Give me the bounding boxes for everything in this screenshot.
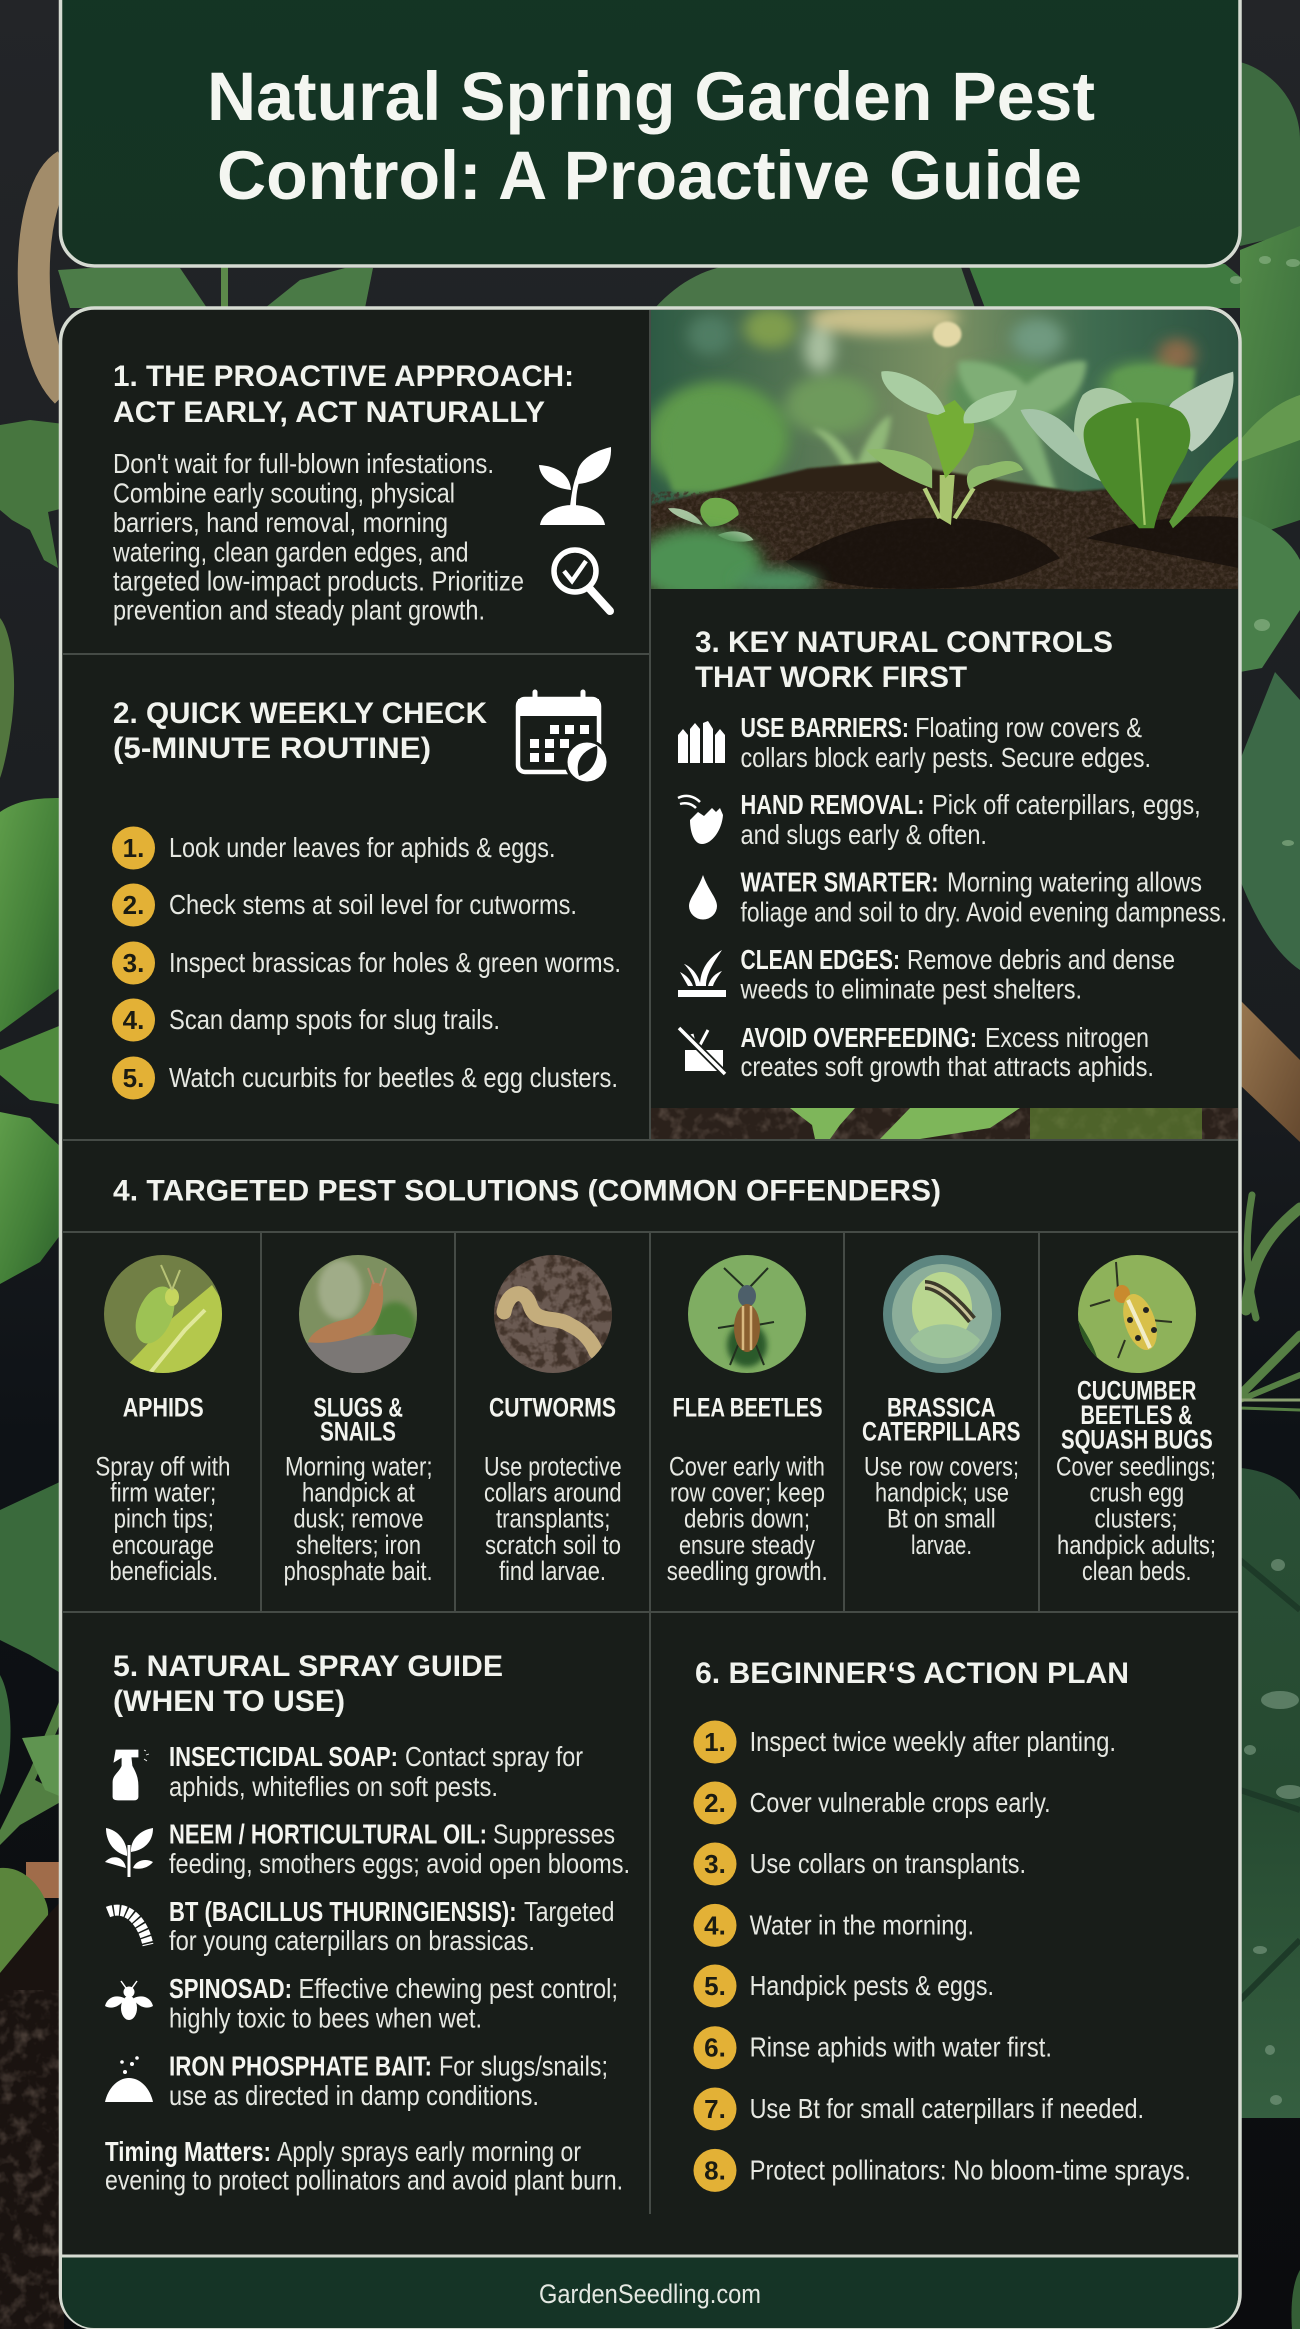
- pest card: brassica caterpillars: Use row covers;: [864, 1451, 1019, 1481]
- action list: 4.: [704, 1910, 726, 1940]
- action list: 2.: [704, 1788, 726, 1818]
- pest card: brassica caterpillars: CATERPILLARS: [862, 1417, 1020, 1447]
- serrated leaf, left: [0, 420, 64, 568]
- header banner: [60, 0, 1240, 266]
- heading 2: (5-MINUTE ROUTINE): [113, 732, 431, 765]
- heading 2: [113, 697, 488, 765]
- pest card: aphids: [95, 1255, 230, 1586]
- background seedlings: [667, 361, 1195, 492]
- photo: slug: [299, 1255, 417, 1373]
- action list: 5.: [704, 1971, 726, 2001]
- item: Bt: Targeted: [524, 1896, 614, 1927]
- action list: 6.: [704, 2033, 726, 2063]
- action list: Inspect twice weekly after planting.: [750, 1726, 1116, 1757]
- footer website: GardenSeedling.com: [539, 2279, 761, 2309]
- pest card: cucumber beetles and squash bugs: [1056, 1255, 1216, 1586]
- item: neem oil: NEEM / HORTICULTURAL OIL:: [169, 1819, 487, 1850]
- action list: 7.: [704, 2094, 726, 2124]
- bottom photo strip: [651, 1108, 1238, 1139]
- pest card: brassica caterpillars: Bt on small: [887, 1504, 996, 1534]
- twine loop: [34, 165, 66, 392]
- body text 1: Combine early scouting, physical: [113, 478, 455, 508]
- soil: [650, 462, 1240, 595]
- pest card: brassica caterpillars: handpick; use: [875, 1478, 1009, 1508]
- item: clean edges: weeds to eliminate pest shelters.: [740, 974, 1082, 1005]
- pest card: aphids: APHIDS: [123, 1393, 204, 1423]
- soil, lower left: [0, 1898, 64, 2329]
- item: clean edges: CLEAN EDGES:: [740, 944, 900, 975]
- action list: Rinse aphids with water first.: [750, 2032, 1052, 2063]
- main panel: [60, 302, 1240, 2329]
- pest card: cutworms: CUTWORMS: [489, 1393, 616, 1423]
- basil leaves, left: [0, 798, 64, 1032]
- heading 5: 5. NATURAL SPRAY GUIDE: [113, 1650, 503, 1683]
- droplets on bright leaves: [1230, 256, 1300, 846]
- central seedling: [866, 371, 1023, 525]
- pest card: slugs and snails: handpick at: [302, 1478, 415, 1508]
- item: iron phosphate bait: [105, 2051, 608, 2111]
- photo: aphid: [104, 1255, 222, 1373]
- title: [207, 58, 1095, 214]
- timing note: Timing Matters:: [105, 2136, 271, 2167]
- action list: 8.: [704, 2155, 726, 2185]
- pest card: brassica caterpillars: [862, 1255, 1020, 1560]
- heading 3: 3. KEY NATURAL CONTROLS: [695, 626, 1113, 659]
- heading 1: ACT EARLY, ACT NATURALLY: [113, 396, 545, 429]
- item: use barriers: USE BARRIERS:: [740, 712, 909, 743]
- body text 1: prevention and steady plant growth.: [113, 594, 485, 626]
- body text 1: targeted low-impact products. Prioritize: [113, 566, 524, 596]
- pest card: flea beetles: FLEA BEETLES: [672, 1393, 822, 1423]
- item: clean edges: Remove debris and dense: [907, 944, 1175, 975]
- item: spinosad: [105, 1973, 618, 2034]
- item: neem oil: Suppresses: [493, 1819, 615, 1850]
- pest card: cutworms: transplants;: [496, 1504, 610, 1534]
- item: Bt: for young caterpillars on brassicas.: [169, 1925, 535, 1956]
- pest card: cucumber beetles and squash bugs: SQUASH BUGS: [1061, 1424, 1213, 1454]
- item: spinosad: Effective chewing pest control;: [298, 1973, 618, 2004]
- heading 3: THAT WORK FIRST: [695, 661, 967, 694]
- body text 1: Don't wait for full-blown infestations.: [113, 448, 494, 479]
- checklist: Check stems at soil level for cutworms.: [169, 889, 577, 920]
- icon: calendar leaf: [518, 692, 608, 783]
- item: insecticidal soap: Contact spray for: [405, 1741, 583, 1772]
- pest card: cutworms: find larvae.: [499, 1556, 606, 1586]
- item: iron phosphate bait: use as directed in damp conditions.: [169, 2080, 539, 2111]
- right side leaves: [1240, 62, 1300, 246]
- title: Control: A Proactive Guide: [217, 137, 1082, 214]
- action list: 1.: [704, 1727, 726, 1757]
- action list: Cover vulnerable crops early.: [750, 1787, 1051, 1818]
- item: hand removal: Pick off caterpillars, eggs,: [932, 789, 1201, 820]
- icon: sprout: [539, 447, 611, 525]
- pest card: slugs and snails: shelters; iron: [296, 1530, 421, 1560]
- item: hand removal: HAND REMOVAL:: [740, 789, 924, 820]
- timing note: evening to protect pollinators and avoid plant burn.: [105, 2164, 623, 2196]
- checklist: 5.: [123, 1063, 144, 1093]
- pest card: aphids: encourage: [112, 1530, 214, 1560]
- item: water smarter: WATER SMARTER:: [740, 866, 938, 898]
- item: use barriers: [678, 712, 1151, 773]
- heading 6: 6. BEGINNER‘S ACTION PLAN: [695, 1657, 1129, 1690]
- item: Bt: [108, 1896, 614, 1956]
- hero photo: seedlings in soil: [635, 302, 1240, 602]
- item: avoid overfeeding: Excess nitrogen: [985, 1022, 1149, 1053]
- pest card: flea beetles: ensure steady: [679, 1530, 816, 1560]
- action list: Protect pollinators: No bloom-time sprays.: [750, 2154, 1191, 2185]
- section 6: beginner's action plan: [694, 1657, 1191, 2192]
- action list: Use Bt for small caterpillars if needed.: [750, 2093, 1144, 2124]
- action list: [694, 1720, 1191, 2192]
- section 5: natural spray guide: [105, 1650, 630, 2196]
- checklist: 3.: [123, 948, 144, 978]
- checklist: Watch cucurbits for beetles & egg clusters.: [169, 1062, 618, 1093]
- checklist: 1.: [123, 833, 144, 863]
- small foreground seedling: [700, 498, 739, 527]
- photo: cucumber beetle: [1078, 1255, 1196, 1373]
- pest card: slugs and snails: dusk; remove: [294, 1504, 424, 1534]
- big dark leaf with droplets, right: [1240, 1468, 1300, 2118]
- pest card: flea beetles: row cover; keep: [670, 1478, 825, 1508]
- item: insecticidal soap: INSECTICIDAL SOAP:: [169, 1741, 398, 1772]
- icon: water drop: [689, 875, 717, 920]
- pest card: slugs and snails: SLUGS &: [313, 1393, 403, 1423]
- spinach leaves, lower left: [0, 1480, 64, 1675]
- icon: hand: [678, 796, 723, 844]
- item: insecticidal soap: [113, 1741, 583, 1802]
- icon: caterpillar: [108, 1910, 148, 1945]
- action list: Water in the morning.: [750, 1909, 974, 1940]
- icon: neem sprig: [105, 1828, 153, 1877]
- item: use barriers: collars block early pests. Secure edges.: [740, 742, 1151, 773]
- icon: bait mound: [105, 2056, 153, 2102]
- checklist: Inspect brassicas for holes & green worms.: [169, 947, 621, 978]
- pest card: cutworms: Use protective: [484, 1451, 622, 1481]
- icon: bee: [105, 1981, 153, 2020]
- checklist: [112, 826, 621, 1100]
- body text 1: [112, 448, 524, 626]
- pest card: slugs and snails: SNAILS: [320, 1417, 396, 1447]
- icon: magnifier check: [554, 550, 610, 611]
- heading 3: [695, 626, 1113, 694]
- body text 1: watering, clean garden edges, and: [112, 536, 468, 568]
- pest card: cucumber beetles and squash bugs: CUCUMBER: [1077, 1375, 1196, 1405]
- heading 1: 1. THE PROACTIVE APPROACH:: [113, 360, 574, 393]
- item: neem oil: feeding, smothers eggs; avoid open blooms.: [169, 1848, 630, 1879]
- item: spinosad: highly toxic to bees when wet.: [169, 2003, 482, 2034]
- section 2: quick weekly check: [112, 692, 621, 1100]
- pest card: aphids: firm water;: [110, 1478, 216, 1508]
- heading 5: [113, 1650, 503, 1718]
- checklist: Look under leaves for aphids & eggs.: [169, 832, 556, 863]
- pest card: slugs and snails: [284, 1255, 433, 1586]
- pest card: aphids: Spray off with: [95, 1451, 230, 1481]
- icon: grass: [678, 950, 726, 997]
- pest card: flea beetles: [667, 1255, 828, 1586]
- item: avoid overfeeding: AVOID OVERFEEDING:: [740, 1022, 977, 1053]
- item: water smarter: [689, 866, 1227, 928]
- leaves between header and panel: [58, 268, 207, 308]
- icon: spray bottle: [113, 1750, 149, 1800]
- photo: flea beetle: [688, 1255, 806, 1373]
- footer band: [62, 2256, 1238, 2329]
- action list: Handpick pests & eggs.: [750, 1970, 994, 2001]
- item: avoid overfeeding: creates soft growth that attracts aphids.: [740, 1051, 1154, 1082]
- right lettuce seedling: [1021, 372, 1240, 528]
- pest card: cucumber beetles and squash bugs: BEETLES &: [1080, 1400, 1192, 1430]
- pest card: slugs and snails: phosphate bait.: [284, 1556, 433, 1586]
- checklist: 2.: [123, 890, 144, 920]
- heading 2: 2. QUICK WEEKLY CHECK: [113, 697, 488, 730]
- oval leaf sliver, left: [0, 618, 14, 778]
- item: insecticidal soap: aphids, whiteflies on soft pests.: [169, 1771, 498, 1802]
- title: Natural Spring Garden Pest: [207, 58, 1095, 135]
- pest card: cucumber beetles and squash bugs: clusters;: [1094, 1504, 1178, 1534]
- item: hand removal: and slugs early & often.: [740, 819, 987, 850]
- pest card: cucumber beetles and squash bugs: crush egg: [1090, 1478, 1184, 1508]
- heading 5: (WHEN TO USE): [113, 1685, 345, 1718]
- item: spinosad: SPINOSAD:: [169, 1973, 292, 2004]
- pest card: cutworms: [484, 1255, 622, 1586]
- pest card: flea beetles: seedling growth.: [667, 1556, 828, 1586]
- pest card: cucumber beetles and squash bugs: clean beds.: [1082, 1556, 1192, 1586]
- photo: cabbage caterpillar: [883, 1255, 1001, 1373]
- checklist: 4.: [123, 1005, 144, 1035]
- grass sprigs, right: [1240, 1195, 1300, 1410]
- section 3: key natural controls: [678, 626, 1227, 1082]
- pest card: cucumber beetles and squash bugs: handpick adults;: [1057, 1530, 1216, 1560]
- item: water smarter: Morning watering allows: [947, 866, 1202, 898]
- action list: Use collars on transplants.: [750, 1848, 1026, 1879]
- pest card: cucumber beetles and squash bugs: Cover seedlings;: [1056, 1451, 1216, 1481]
- pest card: slugs and snails: Morning water;: [285, 1451, 433, 1481]
- pest card: flea beetles: Cover early with: [669, 1451, 825, 1481]
- item: clean edges: [678, 944, 1175, 1005]
- pest card: cutworms: collars around: [484, 1478, 622, 1508]
- item: iron phosphate bait: For slugs/snails;: [439, 2051, 608, 2082]
- section 4 heading: 4. TARGETED PEST SOLUTIONS (COMMON OFFENDERS): [113, 1175, 941, 1208]
- timing note: Apply sprays early morning or: [277, 2136, 581, 2167]
- item: hand removal: [678, 789, 1201, 850]
- timing note: [105, 2136, 623, 2196]
- icon: fence: [678, 721, 725, 763]
- item: iron phosphate bait: IRON PHOSPHATE BAIT:: [169, 2051, 432, 2082]
- item: Bt: BT (BACILLUS THURINGIENSIS):: [169, 1896, 517, 1927]
- pest card: brassica caterpillars: larvae.: [911, 1530, 972, 1560]
- item: avoid overfeeding: [679, 1022, 1154, 1082]
- body text 1: barriers, hand removal, morning: [113, 507, 448, 538]
- pest card: cutworms: scratch soil to: [485, 1530, 621, 1560]
- item: use barriers: Floating row covers &: [915, 712, 1142, 743]
- item: neem oil: [105, 1819, 630, 1879]
- pest card: flea beetles: debris down;: [684, 1504, 810, 1534]
- pest card: brassica caterpillars: BRASSICA: [887, 1393, 996, 1423]
- panel dividers: [62, 310, 1238, 2214]
- pest card: aphids: pinch tips;: [114, 1504, 214, 1534]
- action list: 3.: [704, 1849, 726, 1879]
- photo: cutworm: [494, 1255, 612, 1373]
- section 1: the proactive approach: [112, 360, 611, 626]
- heading 1: [113, 360, 574, 429]
- pest card: aphids: beneficials.: [110, 1556, 218, 1586]
- icon: no fertilizer: [679, 1028, 725, 1074]
- checklist: Scan damp spots for slug trails.: [169, 1004, 500, 1035]
